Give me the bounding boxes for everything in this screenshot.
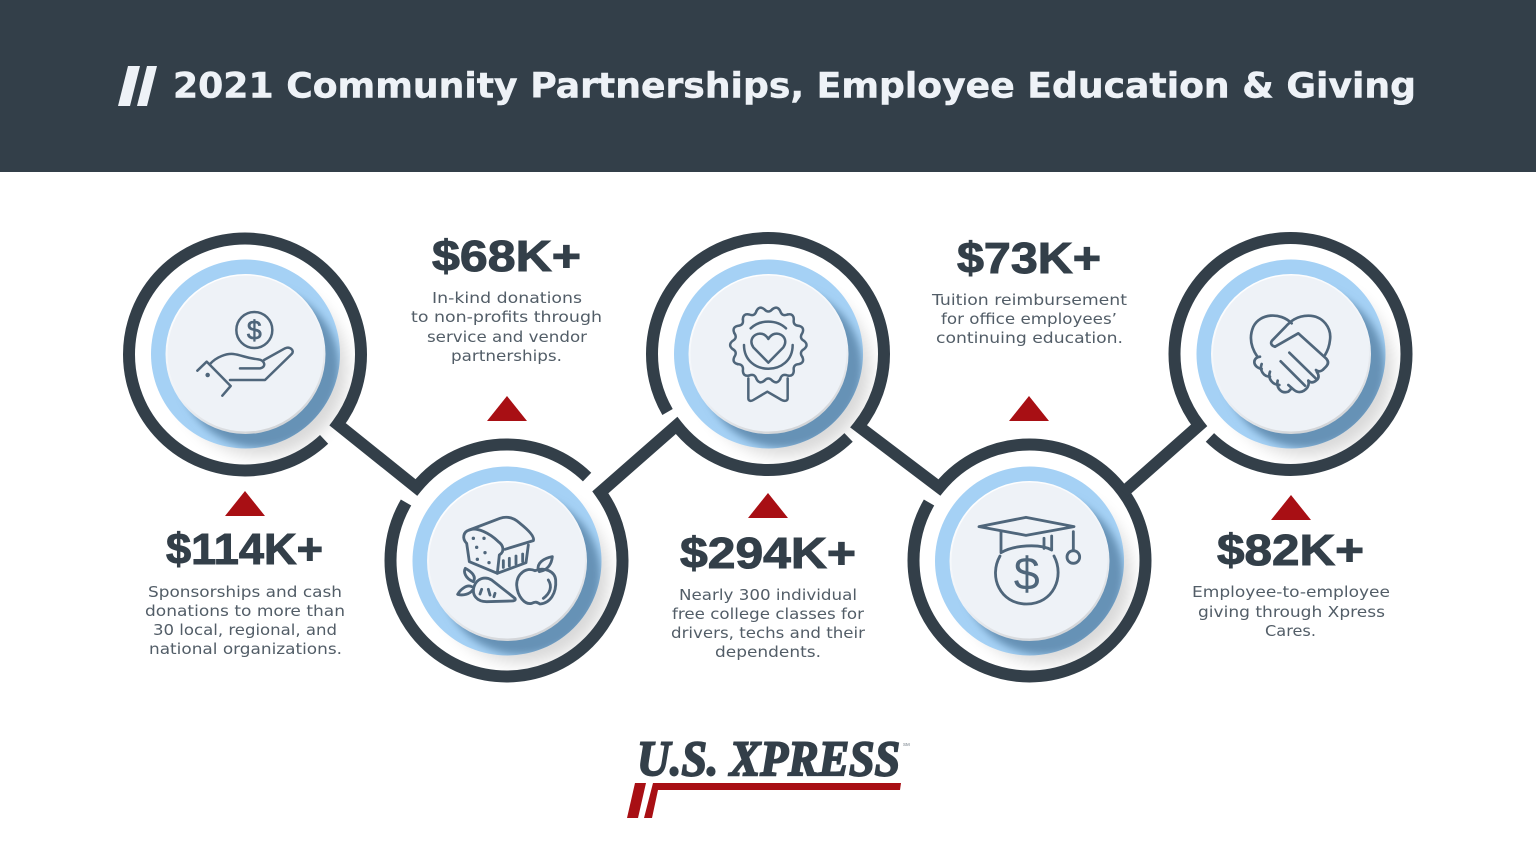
icon: graduation cap with coin <box>979 517 1080 604</box>
stat: $68K+: service and vendor <box>427 328 588 346</box>
arrow: triangle 2 <box>487 396 527 421</box>
icon: hand holding coin <box>197 312 293 396</box>
stat: $73K+: $73K+ <box>957 234 1101 283</box>
stat: $294K+: drivers, techs and their <box>671 624 866 642</box>
stat: $68K+ <box>411 232 602 365</box>
logo: U.S. Xpress <box>627 730 910 818</box>
arrow: triangle 1 <box>225 491 265 516</box>
stat: $114K+ <box>145 525 345 658</box>
stat: $73K+: Tuition reimbursement <box>931 291 1127 309</box>
stat: $82K+: Cares. <box>1265 622 1316 640</box>
stat: $114K+: Sponsorships and cash <box>148 583 342 601</box>
disc 4 <box>935 466 1132 663</box>
stat: $82K+: Employee-to-employee <box>1192 583 1390 601</box>
stat: $114K+: $114K+ <box>166 525 323 574</box>
icon: hand holding coin: $ <box>247 315 262 345</box>
stat: $68K+: In-kind donations <box>432 289 582 307</box>
arrow: triangle 5 <box>1271 495 1311 520</box>
icon: double slash <box>118 66 157 106</box>
arrow: triangle 3 <box>748 493 788 518</box>
arrow: triangle 4 <box>1009 396 1049 421</box>
logo: U.S. Xpress: U.S. XPRESS <box>637 730 900 786</box>
stat: $73K+ <box>931 234 1127 347</box>
stat: $114K+: national organizations. <box>149 640 342 658</box>
stat: $294K+: Nearly 300 individual <box>679 586 857 604</box>
stat: $68K+: partnerships. <box>451 347 562 365</box>
stat: $82K+: giving through Xpress <box>1198 603 1385 621</box>
title: 2021 Community Partnerships, Employee Education & Giving <box>173 66 1416 106</box>
stat: $82K+: $82K+ <box>1217 526 1364 575</box>
icon: rosette with heart <box>716 293 820 401</box>
icon: handshake heart <box>1251 316 1330 392</box>
disc 5 <box>1196 260 1393 456</box>
disc 3 <box>674 260 870 456</box>
stat: $114K+: donations to more than <box>145 602 345 620</box>
stat: $114K+: 30 local, regional, and <box>153 621 337 639</box>
connected ring chain <box>129 238 1406 676</box>
stat: $73K+: continuing education. <box>936 329 1123 347</box>
disc 2 <box>412 466 609 663</box>
stat: $73K+: for office employees’ <box>941 310 1117 328</box>
icon: graduation cap with coin: $ <box>1014 547 1040 599</box>
stat: $294K+: dependents. <box>715 643 821 661</box>
stat: $294K+ <box>671 529 866 661</box>
stat: $82K+ <box>1192 526 1390 640</box>
stat: $68K+: $68K+ <box>432 232 581 281</box>
stat: $294K+: free college classes for <box>672 605 865 623</box>
logo: U.S. Xpress: SM <box>903 742 910 747</box>
disc 1 <box>151 260 348 456</box>
header band <box>0 0 1536 172</box>
stat: $68K+: to non-profits through <box>411 308 602 326</box>
stat: $294K+: $294K+ <box>680 529 856 578</box>
icon: bread, carrot and apple <box>458 517 556 604</box>
